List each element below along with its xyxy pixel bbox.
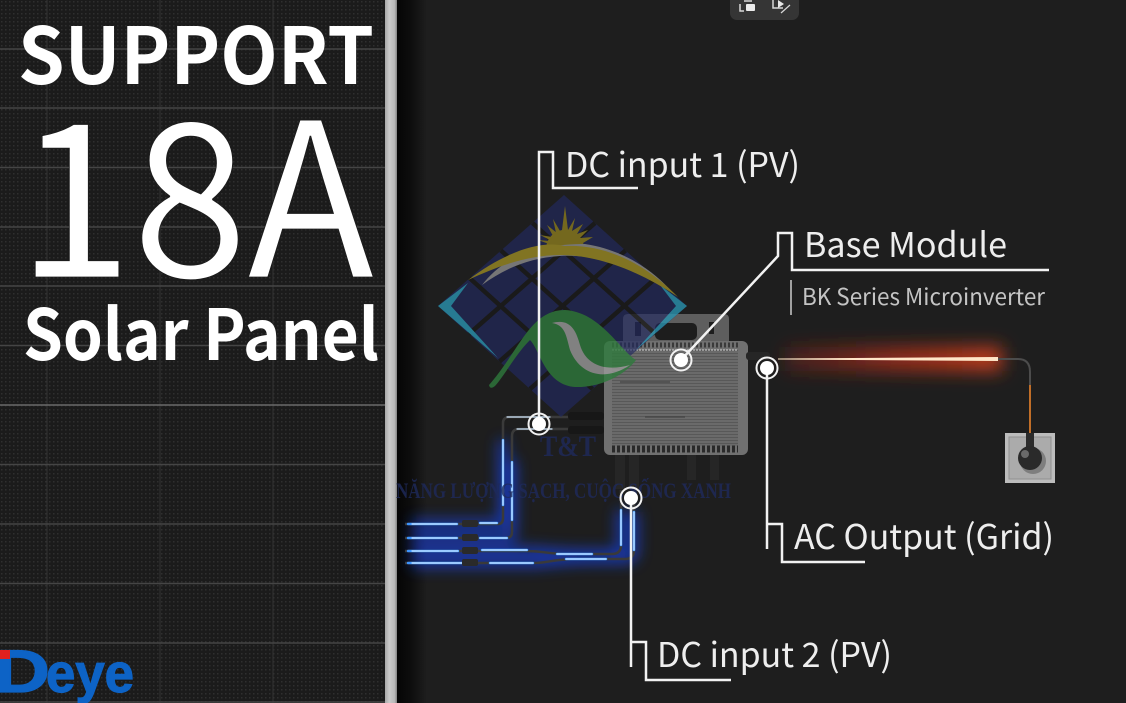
watermark solar cells <box>438 195 687 417</box>
title: Solar Panel: Solar Panel <box>23 280 379 381</box>
callout: AC Output: AC Output (Grid) <box>794 510 1054 559</box>
watermark arc <box>468 244 678 297</box>
callout: DC input 2: DC input 2 (PV) <box>657 628 892 677</box>
solar panel <box>0 0 397 703</box>
callout: Base Module: BK Series Microinverter <box>802 278 1045 312</box>
dark cables <box>405 417 634 563</box>
callout: DC input 1 <box>528 138 800 434</box>
wall socket and plug <box>1005 433 1055 483</box>
AC output glowing cable <box>778 347 1030 433</box>
callout: DC input 1: DC input 1 (PV) <box>565 138 800 187</box>
callout: DC input 2 <box>620 488 892 680</box>
watermark arc gray <box>482 244 672 292</box>
panel frame <box>385 0 397 703</box>
watermark sun <box>538 206 593 250</box>
light core <box>412 417 634 563</box>
callout: Base Module <box>670 218 1049 370</box>
callout: AC Output <box>756 358 1054 562</box>
title: 18A: 18A <box>17 29 374 339</box>
watermark teal corners <box>438 283 687 358</box>
callout: Base Module: Base Module <box>804 218 1007 267</box>
light segments <box>408 440 634 563</box>
DC and AC ports <box>615 352 770 489</box>
logo: Deye: eye <box>46 642 134 703</box>
diagram: input wires <box>405 412 634 566</box>
browser overlay toolbar <box>730 0 799 20</box>
logo: Deye <box>0 638 134 703</box>
watermark T&T: T&T <box>540 430 596 463</box>
watermark logo <box>396 195 731 503</box>
watermark leaf <box>489 310 636 388</box>
microinverter <box>604 314 770 489</box>
MC4 connectors <box>462 412 604 566</box>
watermark slogan: NĂNG LƯỢNG SẠCH, CUỘC SỐNG XANH <box>396 478 731 503</box>
